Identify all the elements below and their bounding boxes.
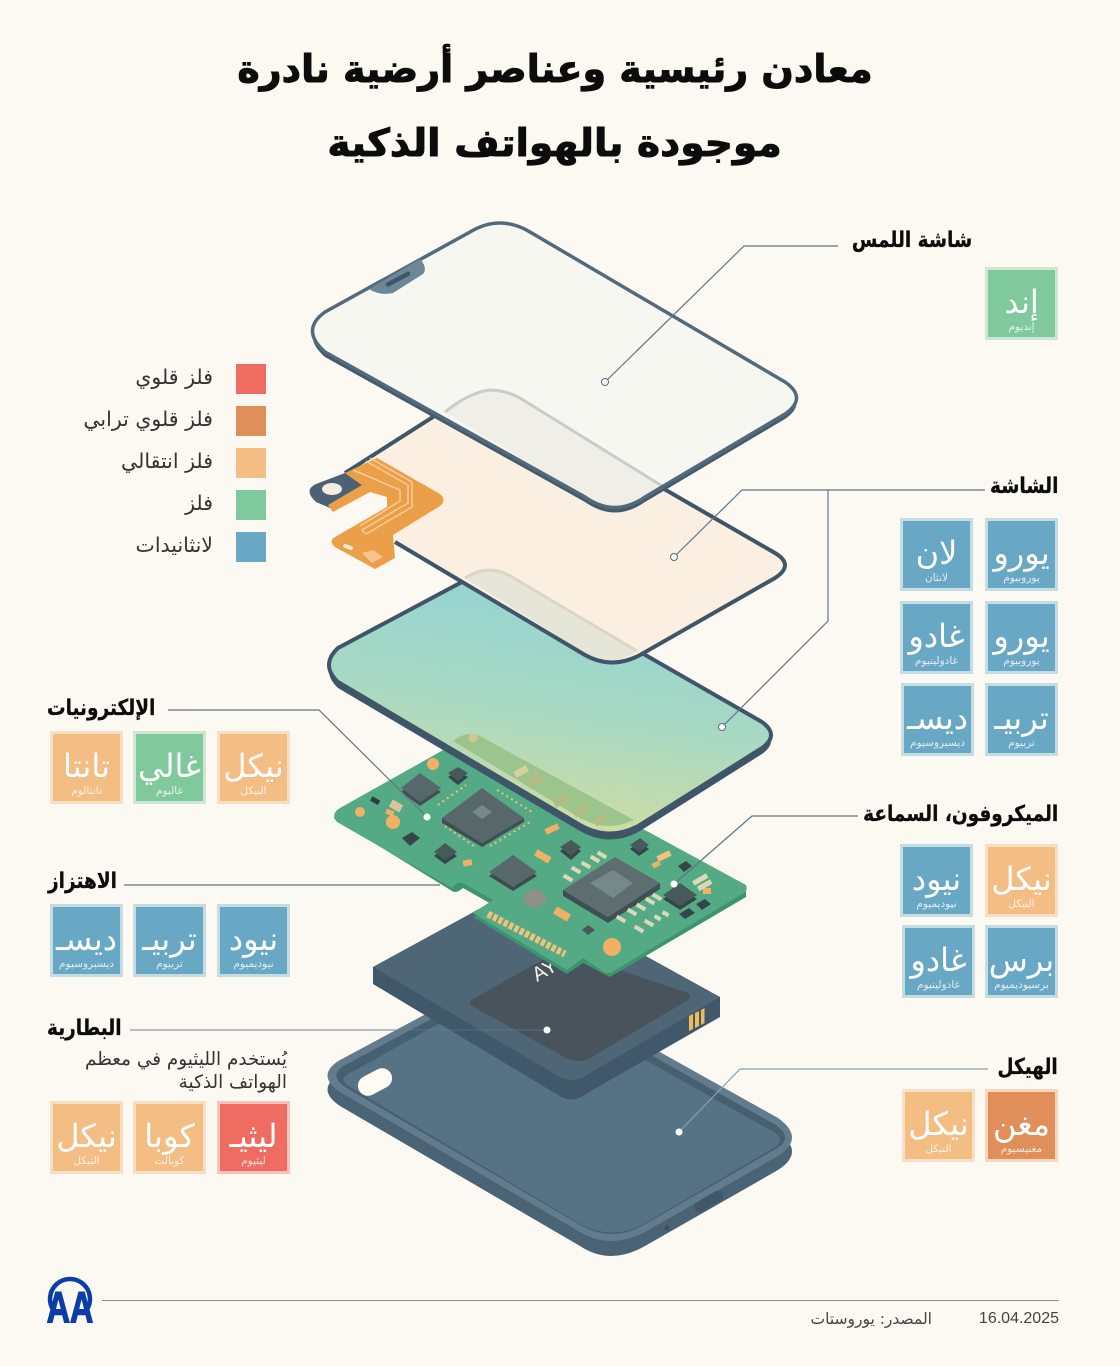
tile: magnesium: مغنيسيوم: [1001, 1143, 1042, 1155]
legend label: metal: فلز: [185, 491, 213, 515]
tile: gallium: [133, 731, 206, 804]
tile: gadolinium: غادولينيوم: [915, 655, 958, 667]
heading: battery: البطارية: [47, 1016, 122, 1041]
icon: battery contacts: [689, 1008, 704, 1031]
tile: indium: إنديوم: [1008, 321, 1035, 333]
tile: terbium: تربيـ: [142, 920, 197, 958]
layer: battery: [373, 890, 720, 1100]
heading: electronics: الإلكترونيات: [47, 696, 155, 721]
tile: terbium: تربيوم: [156, 958, 183, 970]
tile: dysprosium: ديسـ: [56, 920, 117, 958]
layer: circuit board: [334, 735, 747, 977]
tile: europium: يورو: [993, 617, 1050, 655]
tile: europium: [985, 518, 1058, 591]
tile: dysprosium: ديسبروسيوم: [59, 958, 114, 970]
source: المصدر: يوروستات: [811, 1310, 932, 1328]
tile: europium: يوروبيوم: [1003, 655, 1040, 667]
dark camera tab: [310, 473, 362, 508]
tile: tantalum: تانتالوم: [71, 785, 102, 797]
layer: display screen: [329, 574, 771, 840]
tile: nickel: نيكل: [223, 747, 284, 785]
tile: terbium: تربيـ: [994, 699, 1049, 737]
tile: cobalt: كوبالت: [154, 1155, 185, 1167]
tile: nickel: النيكل: [1008, 898, 1035, 910]
tile: lithium: ليثيـ: [229, 1117, 278, 1155]
tile: nickel: [902, 1089, 975, 1162]
tile: europium: يوروبيوم: [1003, 572, 1040, 584]
legend label: lanthanides: لانثانيدات: [136, 533, 213, 557]
tile: europium: يورو: [993, 534, 1050, 572]
tile: tantalum: [50, 731, 123, 804]
title: معادن رئيسية وعناصر أرضية نادرة: [237, 47, 873, 91]
main chip: [438, 785, 532, 847]
battery note: [85, 1049, 288, 1093]
legend label: alkaline earth metal: فلز قلوي ترابي: [83, 407, 213, 431]
legend swatch: metal: [236, 490, 266, 520]
tile: dysprosium: [901, 683, 974, 756]
tile: nickel: [50, 1101, 123, 1174]
tile: gadolinium: [900, 601, 973, 674]
tile: nickel: نيكل: [991, 860, 1052, 898]
tile: neodymium: نيود: [229, 920, 278, 958]
battery note: يُستخدم الليثيوم في معظم: [85, 1049, 287, 1070]
tile: nickel: نيكل: [56, 1117, 117, 1155]
heading: screen: الشاشة: [990, 474, 1058, 499]
heading: vibration: الاهتزاز: [48, 869, 117, 894]
icon: camera cutout: [354, 1065, 396, 1099]
circuit board showing through screen: [453, 734, 634, 826]
tile: neodymium: [900, 844, 973, 917]
legend swatch: alkali metal: [236, 364, 266, 394]
legend swatch: lanthanides: [236, 532, 266, 562]
tile: gallium: غاليوم: [156, 785, 183, 797]
tile: lanthanum: لان: [916, 534, 957, 572]
tile: gallium: غالي: [138, 747, 201, 785]
layer: back case: [328, 978, 792, 1256]
leader lines: [124, 246, 988, 1132]
tile: nickel: [217, 731, 290, 804]
date: 16.04.2025: [979, 1310, 1059, 1327]
footer rule: [102, 1300, 1059, 1301]
legend label: transition metal: فلز انتقالي: [121, 449, 213, 473]
tile: magnesium: مغن: [993, 1105, 1050, 1143]
tile: gadolinium: غادو: [910, 941, 967, 979]
battery label: [470, 950, 690, 1061]
legend label: alkali metal: فلز قلوي: [135, 365, 213, 389]
tile: gadolinium: غادولينيوم: [917, 979, 960, 991]
leader dots: [424, 378, 726, 1136]
heading: frame: الهيكل: [998, 1055, 1058, 1080]
tile: neodymium: نيوديميوم: [916, 898, 957, 910]
tile: magnesium: [985, 1089, 1058, 1162]
tile: europium: [985, 601, 1058, 674]
tile: nickel: النيكل: [73, 1155, 100, 1167]
legend swatch: alkaline earth metal: [236, 406, 266, 436]
title: موجودة بالهواتف الذكية: [328, 121, 782, 165]
screen outline showing through panel: [465, 570, 637, 661]
tile: lanthanum: لانثان: [925, 572, 948, 584]
small chips: [370, 767, 711, 935]
notch speaker: [369, 259, 425, 294]
tile: terbium: [985, 683, 1058, 756]
tile: lithium: ليثيوم: [241, 1155, 266, 1167]
tile: terbium: تربيوم: [1008, 737, 1035, 749]
tile: nickel: النيكل: [925, 1143, 952, 1155]
tile: terbium: [133, 904, 206, 977]
gold contact row: [488, 914, 565, 954]
tile: tantalum: تانتا: [63, 747, 110, 785]
icon: charging port: [692, 1189, 725, 1214]
processor chip: [563, 857, 660, 923]
layer: LCD panel with flex cable: [310, 394, 785, 662]
heading: microphone, speaker: الميكروفون، السماعة: [863, 802, 1058, 827]
tile: gadolinium: غادو: [908, 617, 965, 655]
tile: nickel: النيكل: [240, 785, 267, 797]
tile: indium: [985, 267, 1058, 340]
tile: indium: إند: [1004, 283, 1039, 321]
title: [237, 44, 873, 166]
legend: [83, 364, 266, 562]
tile: neodymium: نيوديميوم: [233, 958, 274, 970]
battery note: الهواتف الذكية: [179, 1072, 287, 1093]
light passives: [563, 851, 712, 933]
flex cable: [328, 458, 444, 569]
legend swatch: transition metal: [236, 448, 266, 478]
layer: touch glass: [312, 223, 796, 512]
tile: cobalt: كوبا: [144, 1117, 195, 1155]
tile: lithium: [217, 1101, 290, 1174]
orange pads: [355, 758, 711, 956]
tile: praseodymium: برسيوديميوم: [994, 979, 1049, 991]
tile: lanthanum: [900, 518, 973, 591]
tile: cobalt: [133, 1101, 206, 1174]
tile: neodymium: [217, 904, 290, 977]
heading: touch screen: شاشة اللمس: [852, 228, 972, 253]
tile: praseodymium: برس: [989, 941, 1054, 979]
tile: praseodymium: [985, 925, 1058, 998]
tile: dysprosium: ديسـ: [907, 699, 968, 737]
tile: nickel: نيكل: [908, 1105, 969, 1143]
tile: dysprosium: [50, 904, 123, 977]
tile: dysprosium: ديسبروسيوم: [910, 737, 965, 749]
tile: neodymium: نيود: [912, 860, 961, 898]
gray capacitor: [523, 888, 546, 909]
tile: gadolinium: [902, 925, 975, 998]
layer: battery: AY: [528, 955, 561, 986]
panel showing through glass: [445, 390, 660, 508]
tile: nickel: [985, 844, 1058, 917]
